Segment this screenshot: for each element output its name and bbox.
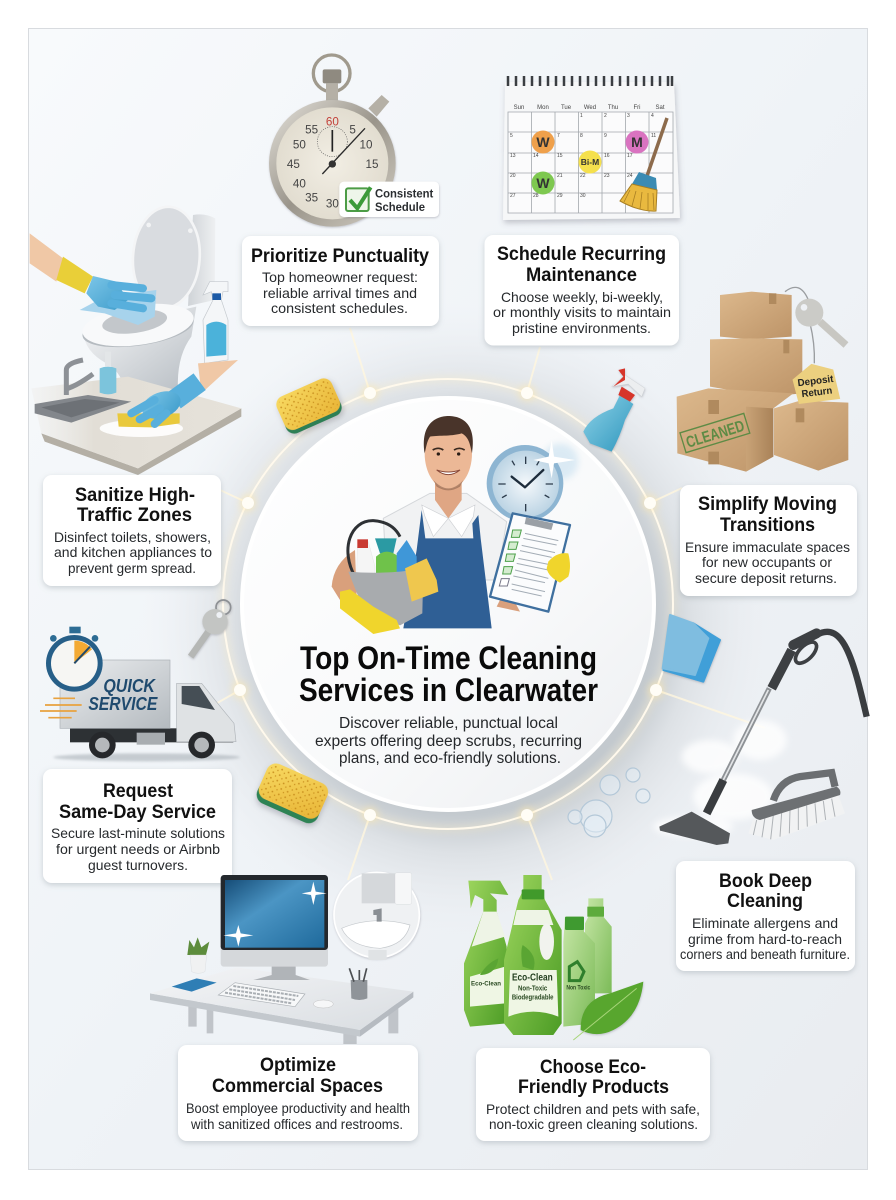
scrub brush: [748, 773, 845, 840]
illustration: toilet and sink cleaning: [30, 204, 241, 475]
card: simplify moving transitions: Simplify Moving: [698, 493, 837, 515]
card: sanitize high-traffic zones: Sanitize High-: [75, 484, 195, 506]
clock: [487, 440, 578, 522]
calendar date numbers: 11: [651, 133, 656, 139]
calendar date numbers: 3: [627, 113, 630, 119]
card: simplify moving transitions: Transitions: [720, 514, 815, 536]
consistent schedule badge: Schedule: [375, 200, 425, 214]
card: book deep cleaning: [676, 861, 855, 971]
calendar date numbers: 1: [580, 113, 583, 119]
card: optimize commercial spaces: Optimize: [260, 1054, 336, 1076]
stopwatch numerals: 50: [293, 139, 306, 152]
calendar date numbers: 15: [557, 153, 563, 159]
consistent schedule badge: [339, 182, 439, 217]
card: book deep cleaning: Book Deep: [719, 870, 812, 892]
calendar weekday labels: Fri: [634, 105, 640, 111]
card: sanitize high-traffic zones: prevent germ spread.: [68, 560, 196, 576]
mini stopwatch: [46, 627, 103, 692]
stopwatch numerals: [287, 116, 378, 210]
stopwatch numerals: 30: [326, 197, 339, 210]
card: simplify moving transitions: [680, 485, 857, 596]
speed lines: [40, 698, 82, 718]
card: schedule recurring maintenance: pristine environments.: [512, 320, 651, 336]
card: request same-day service: [43, 769, 232, 883]
consistent schedule badge: Consistent: [375, 186, 433, 200]
card: optimize commercial spaces: Commercial Spaces: [212, 1075, 383, 1097]
calendar date numbers: 27: [510, 193, 516, 199]
calendar date numbers: 28: [533, 193, 539, 199]
card: request same-day service: Same-Day Service: [59, 801, 216, 823]
central description: Discover reliable, punctual local: [339, 715, 558, 732]
calendar date numbers: 7: [557, 133, 560, 139]
card: sanitize high-traffic zones: and kitchen appliances to: [54, 544, 212, 560]
steam: [653, 720, 787, 837]
calendar weekday labels: Wed: [584, 105, 596, 111]
illustration: vacuum and scrub brush: [653, 632, 867, 845]
ring nodes: [232, 385, 664, 823]
spray bottle: [464, 881, 508, 1027]
card: choose eco-friendly products: Protect children and pets with safe,: [486, 1101, 700, 1117]
restroom inset: [334, 872, 419, 960]
card: book deep cleaning: grime from hard-to-reach: [688, 931, 842, 947]
cleaner figure: [383, 416, 507, 628]
truck: [53, 660, 240, 761]
calendar date numbers: [510, 113, 656, 199]
card: prioritize punctuality: Top homeowner request:: [262, 269, 418, 285]
calendar date numbers: 4: [651, 113, 654, 119]
card: prioritize punctuality: Prioritize Punctuality: [251, 245, 429, 267]
gloved hand with sponge: [100, 360, 238, 437]
calendar weekday labels: Sat: [655, 105, 665, 111]
card: schedule recurring maintenance: or monthly visits to maintain: [493, 304, 671, 320]
card: simplify moving transitions: for new occupants or: [702, 554, 832, 570]
calendar date numbers: 29: [557, 193, 563, 199]
calendar date numbers: 22: [580, 173, 586, 179]
monitor: [221, 875, 328, 980]
card: book deep cleaning: Eliminate allergens and: [692, 915, 838, 931]
card: request same-day service: for urgent needs or Airbnb: [56, 841, 220, 857]
calendar markers: W: [536, 175, 550, 191]
broom: [620, 118, 667, 211]
stopwatch numerals: 10: [360, 139, 373, 152]
illustration: office desk with computer and restroom inset: [150, 872, 419, 1044]
vacuum wand: [659, 632, 867, 845]
quick service label: SERVICE: [88, 693, 158, 714]
glowing ring and connector spokes: [212, 328, 765, 880]
stopwatch numerals: 35: [305, 191, 318, 204]
central description: [315, 715, 582, 767]
card: optimize commercial spaces: [178, 1045, 418, 1141]
central title: [299, 640, 598, 708]
illustration: calendar with broom: [503, 76, 680, 220]
icon: blue spray bottle: [583, 368, 645, 452]
card: prioritize punctuality: [242, 236, 439, 326]
card: book deep cleaning: Cleaning: [727, 890, 803, 912]
icon: blue sponge: [663, 615, 720, 682]
quick service label: [88, 675, 158, 714]
stopwatch numerals: 45: [287, 158, 300, 171]
cleaned stamp: CLEANED: [684, 418, 747, 452]
calendar markers: M: [631, 134, 643, 150]
stopwatch numerals: 5: [349, 123, 356, 136]
card: sanitize high-traffic zones: [43, 475, 221, 586]
card: schedule recurring maintenance: Choose weekly, bi-weekly,: [501, 289, 663, 305]
deposit return tag: Return: [801, 386, 833, 400]
stopwatch numerals: 60: [326, 116, 339, 129]
leaf: [573, 982, 643, 1040]
icon: yellow sponge top left: [273, 376, 345, 436]
card: book deep cleaning: corners and beneath furniture.: [680, 946, 850, 962]
gloved hand wiping seat: [30, 233, 156, 325]
icon: silver key: [191, 600, 231, 657]
card: prioritize punctuality: reliable arrival times and: [263, 285, 417, 301]
illustration: stopwatch with consistent schedule badge: [269, 55, 439, 227]
card: simplify moving transitions: secure deposit returns.: [695, 570, 837, 586]
stopwatch numerals: 40: [293, 177, 306, 190]
illustration: quick service truck: [40, 627, 240, 761]
calendar date numbers: 5: [510, 133, 513, 139]
central description: experts offering deep scrubs, recurring: [315, 733, 582, 750]
card: prioritize punctuality: consistent schedules.: [271, 300, 408, 316]
card: request same-day service: guest turnovers.: [88, 857, 188, 873]
calendar weekday labels: Mon: [537, 105, 549, 111]
calendar weekday labels: Sun: [514, 105, 524, 111]
small bottle: Non Toxic: [566, 984, 591, 991]
tall bottle: [585, 898, 612, 993]
illustration: moving boxes with key and deposit tag: [677, 287, 848, 472]
illustration: eco-friendly product bottles: [464, 875, 643, 1040]
key: [785, 287, 846, 363]
deposit return tag: Deposit: [797, 374, 835, 389]
card: request same-day service: Secure last-minute solutions: [51, 825, 225, 841]
main bottle: Non-Toxic: [518, 986, 547, 993]
calendar weekday labels: Thu: [608, 105, 618, 111]
icon: soap bubbles: [568, 768, 650, 837]
calendar date numbers: 24: [627, 173, 633, 179]
deposit return tag: [791, 361, 840, 404]
card: schedule recurring maintenance: Maintenance: [526, 264, 637, 286]
card: optimize commercial spaces: Boost employee productivity and health: [186, 1100, 410, 1116]
clipboard: [490, 513, 570, 612]
central halo shadow: [142, 302, 782, 942]
desk: [150, 967, 413, 1044]
keyboard, mouse and tablet: [172, 978, 333, 1008]
central description: plans, and eco-friendly solutions.: [339, 750, 561, 767]
icon: yellow sponge bottom left: [253, 760, 331, 826]
central title: Services in Clearwater: [299, 672, 598, 708]
calendar markers: Bi-M: [581, 157, 599, 167]
card: schedule recurring maintenance: Schedule Recurring: [497, 243, 666, 265]
calendar weekday labels: [514, 105, 665, 111]
plant and pen holder: [187, 937, 367, 1000]
card: sanitize high-traffic zones: Traffic Zones: [77, 504, 192, 526]
card: request same-day service: Request: [103, 780, 173, 802]
card: choose eco-friendly products: [476, 1048, 710, 1141]
card: sanitize high-traffic zones: Disinfect toilets, showers,: [54, 529, 211, 545]
calendar date numbers: 30: [580, 193, 586, 199]
main bottle: Eco-Clean: [512, 973, 553, 984]
card: choose eco-friendly products: Friendly Products: [518, 1076, 669, 1098]
calendar date numbers: 21: [557, 173, 563, 179]
spray bottle and soap dispenser: [100, 282, 228, 394]
card: choose eco-friendly products: non-toxic green cleaning solutions.: [489, 1116, 698, 1132]
stopwatch numerals: 55: [305, 123, 318, 136]
card: optimize commercial spaces: with sanitized offices and restrooms.: [190, 1116, 403, 1132]
stacked boxes: [677, 292, 848, 472]
calendar date numbers: 8: [580, 133, 583, 139]
bucket with supplies: [332, 521, 438, 634]
calendar date numbers: 13: [510, 153, 516, 159]
calendar date numbers: 16: [604, 153, 610, 159]
card: simplify moving transitions: Ensure immaculate spaces: [685, 539, 850, 555]
counter and sink: [31, 360, 241, 475]
calendar markers: [532, 130, 648, 194]
main bottle: [504, 875, 562, 1035]
calendar date numbers: 14: [533, 153, 539, 159]
calendar date numbers: 9: [604, 133, 607, 139]
stopwatch body: [269, 55, 396, 227]
illustration: cleaner with bucket, clock and clipboard: [332, 416, 578, 634]
central disc: [242, 398, 654, 810]
quick service label: QUICK: [103, 675, 156, 696]
calendar markers: W: [536, 134, 550, 150]
small bottle: [563, 917, 595, 1027]
calendar date numbers: 2: [604, 113, 607, 119]
central title: Top On-Time Cleaning: [300, 640, 597, 676]
card: choose eco-friendly products: Choose Eco-: [540, 1056, 646, 1078]
toilet: [80, 204, 215, 390]
stopwatch numerals: 15: [366, 158, 378, 171]
spray bottle: Eco-Clean: [471, 980, 501, 987]
calendar date numbers: 17: [627, 153, 633, 159]
calendar weekday labels: Tue: [561, 105, 572, 111]
calendar date numbers: 20: [510, 173, 516, 179]
card: schedule recurring maintenance: [484, 235, 679, 346]
calendar page: [503, 76, 680, 220]
calendar date numbers: 23: [604, 173, 610, 179]
main bottle: Biodegradable: [512, 995, 554, 1002]
